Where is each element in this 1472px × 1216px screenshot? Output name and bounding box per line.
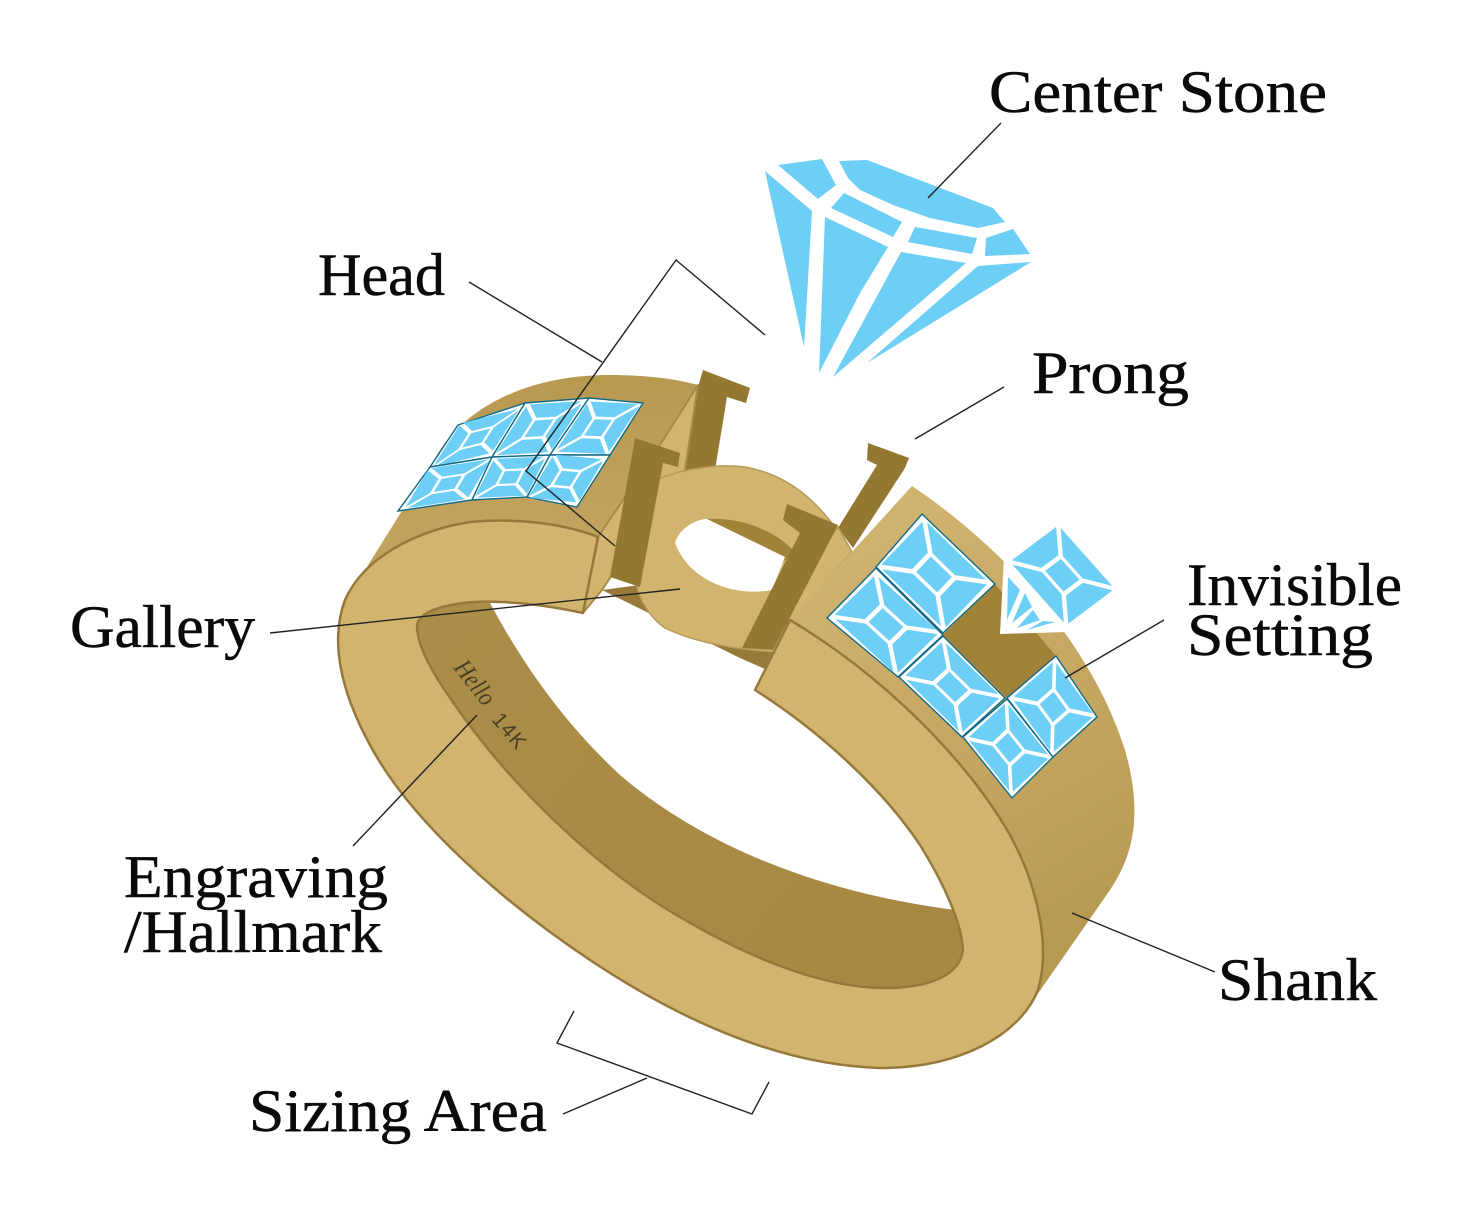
label: engraving / hallmark (124, 844, 388, 965)
label: sizing area: Sizing Area (249, 1078, 547, 1144)
center stone diamond (765, 159, 1031, 377)
stone L1 (430, 403, 525, 467)
inner band (415, 602, 966, 995)
bracket: sizing area (557, 1011, 769, 1114)
leader: engraving (353, 715, 477, 846)
left shoulder top surface (360, 375, 698, 600)
right shoulder wedge (755, 527, 852, 640)
engraving text: 14K (487, 708, 531, 754)
bracket: head (526, 260, 765, 546)
gallery opening (675, 519, 785, 592)
label: invisible setting: Setting (1187, 602, 1373, 668)
label: invisible setting (1187, 552, 1402, 668)
leader: sizing area (563, 1078, 647, 1114)
leader: invisible setting (1065, 620, 1164, 678)
label: head: Head (318, 242, 445, 308)
back right prong (838, 443, 909, 548)
engraving text: Hello (448, 653, 502, 711)
label: center stone: Center Stone (989, 59, 1327, 125)
stone R5 (1007, 656, 1097, 757)
gallery opening inner lip (707, 519, 795, 562)
stone R3 (899, 636, 1005, 737)
left shoulder side wedge (583, 385, 698, 613)
back left prong (683, 370, 750, 472)
empty stone seat (943, 584, 1056, 698)
engraving text (448, 653, 531, 754)
stone L5 (472, 455, 550, 500)
leader: gallery (270, 589, 680, 633)
stone R1 (876, 514, 995, 633)
label: prong: Prong (1032, 340, 1189, 406)
shank front face (338, 521, 1043, 1068)
stone L3 (550, 398, 643, 455)
leader: head (469, 282, 602, 362)
gallery (637, 466, 850, 652)
leader: shank (1072, 913, 1215, 972)
leader: center stone (928, 123, 1001, 198)
stone R4 (963, 699, 1053, 798)
stone R2 (827, 568, 943, 677)
gallery underside shadow (602, 585, 775, 672)
label: engraving / hallmark: Engraving (124, 844, 388, 910)
stone L6 (527, 455, 610, 507)
accent stones: left shoulder (398, 398, 643, 511)
front left prong (610, 438, 680, 587)
label: engraving / hallmark: /Hallmark (124, 899, 382, 965)
label: shank: Shank (1218, 947, 1377, 1013)
label: gallery: Gallery (70, 594, 255, 660)
right shoulder top surface (790, 486, 1134, 1005)
stone L2 (492, 398, 589, 457)
floating square-cut stone (1000, 521, 1119, 634)
invisible setting: right shoulder stones (827, 514, 1097, 798)
front right prong (742, 504, 838, 650)
label: invisible setting: Invisible (1187, 552, 1402, 618)
ring illustration (338, 370, 1134, 1068)
leader: prong (915, 387, 1004, 439)
stone L4 (398, 457, 492, 511)
